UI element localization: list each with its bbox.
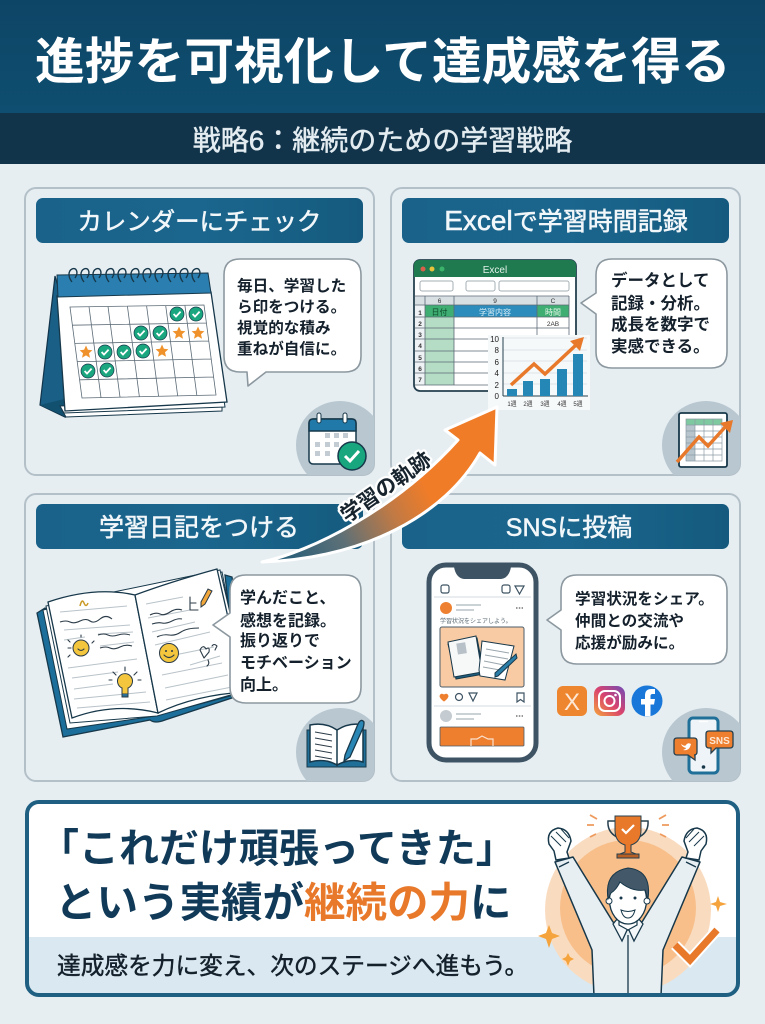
header banner <box>0 0 765 164</box>
title: 進捗を可視化して達成感を得る <box>35 34 731 90</box>
arrow: learning trajectory <box>262 407 497 562</box>
arrow label: 学習の軌跡 <box>337 448 436 527</box>
subtitle band <box>0 113 765 164</box>
illustration: spreadsheet window: 6 <box>438 298 442 305</box>
sparkles <box>538 896 727 966</box>
panel heading: calendar: カレンダーにチェック <box>78 209 321 236</box>
speech bubble: sns <box>547 575 727 664</box>
illustration: spreadsheet window: 2AB <box>547 321 559 328</box>
corner icon: spreadsheet growth <box>662 401 739 474</box>
speech bubble: calendar: 視覚的な積み <box>237 318 331 337</box>
icon: facebook logo <box>632 686 662 716</box>
corner icon: notebook and pen <box>296 708 373 780</box>
illustration: spreadsheet window <box>414 260 576 391</box>
speech bubble: diary <box>213 575 361 703</box>
icon: hearts <box>200 644 217 666</box>
panel heading: excel <box>402 198 729 243</box>
corner icon: phone and chat bubbles <box>662 708 739 780</box>
corner icon: calendar check <box>296 401 373 474</box>
icon: trophy <box>587 815 669 858</box>
panel: sns <box>391 494 750 796</box>
speech bubble: sns: 仲間との交流や <box>575 612 684 630</box>
speech bubble: excel: 成長を数字で <box>611 314 710 334</box>
panel heading: sns <box>402 504 729 549</box>
speech bubble: diary: 感想を記録。 <box>240 611 336 630</box>
illustration: spreadsheet window: 時間 <box>545 308 561 317</box>
bar chart: weekly study time: 4 <box>495 369 500 378</box>
bar chart: weekly study time: 3週 <box>540 400 550 408</box>
bar chart: weekly study time: 10 <box>490 335 500 344</box>
bar chart: weekly study time: 6 <box>495 358 500 367</box>
icon: smiley <box>160 644 178 662</box>
panel heading: calendar <box>36 198 363 243</box>
speech bubble: calendar: ら印をつける。 <box>237 298 346 316</box>
callout: achievements <box>27 802 738 996</box>
speech bubble: diary: 向上。 <box>240 676 288 694</box>
callout lower band <box>27 937 738 995</box>
illustration: spreadsheet window: 9 <box>493 298 497 305</box>
illustration: spreadsheet window: 6 <box>418 366 422 373</box>
speech bubble: diary: モチベーション <box>240 654 352 672</box>
icon: sun face <box>68 635 94 657</box>
callout headline <box>39 827 516 926</box>
speech bubble: sns: 学習状況をシェア。 <box>575 589 714 608</box>
callout subtext: 達成感を力に変え、次のステージへ進もう。 <box>57 953 528 980</box>
illustration: spreadsheet window: 5 <box>418 355 422 362</box>
bar chart: weekly study time <box>488 335 590 410</box>
panel heading: diary <box>36 504 363 549</box>
illustration: spreadsheet window: 7 <box>418 377 422 384</box>
panel heading: excel: Excelで学習時間記録 <box>444 205 688 236</box>
illustration: spreadsheet window: Excel <box>483 265 507 276</box>
panel heading: sns: SNSに投稿 <box>506 514 632 542</box>
illustration: smartphone post <box>429 565 536 760</box>
icon: instagram logo <box>594 686 625 716</box>
illustration: spreadsheet window: 学習内容 <box>479 307 511 317</box>
speech bubble: diary: 学んだこと、 <box>240 588 335 607</box>
bar chart: weekly study time: 2 <box>495 381 500 390</box>
icon: x logo: X <box>564 689 580 716</box>
illustration: person with trophy <box>538 815 727 996</box>
bar chart: weekly study time: 5週 <box>573 400 583 408</box>
bar chart: weekly study time: 8 <box>495 346 500 355</box>
panel heading: diary: 学習日記をつける <box>99 514 299 542</box>
speech bubble: excel: 実感できる。 <box>611 336 710 356</box>
speech bubble: calendar: 重ねが自信に。 <box>237 339 346 358</box>
bar chart: weekly study time: 2週 <box>523 400 533 408</box>
illustration: spreadsheet window: C <box>551 298 556 305</box>
speech bubble: excel: 記録・分析。 <box>611 293 710 313</box>
icon: x logo <box>557 686 587 716</box>
icon: light bulb <box>109 667 141 697</box>
icon: pencil <box>190 589 212 610</box>
bar chart: weekly study time: 0 <box>495 392 500 401</box>
speech bubble: diary: 振り返りで <box>240 632 320 650</box>
corner icon: phone and chat bubbles: SNS <box>709 736 730 747</box>
icon: large check mark <box>675 930 717 960</box>
illustration: spreadsheet window: 4 <box>418 343 422 350</box>
speech bubble: calendar: 毎日、学習した <box>237 276 346 295</box>
illustration: open notebook <box>37 569 250 737</box>
speech bubble: excel <box>581 259 727 368</box>
callout headline: という実績が継続の力に <box>55 879 512 926</box>
illustration: spreadsheet window: 1 <box>418 310 422 317</box>
bar chart: weekly study time: 1週 <box>507 400 517 408</box>
speech bubble: calendar <box>224 259 361 386</box>
panel: calendar <box>25 188 384 489</box>
illustration: desk calendar <box>40 269 227 417</box>
bar chart: weekly study time: 4週 <box>557 400 567 408</box>
subtitle: 戦略6：継続のための学習戦略 <box>193 125 572 156</box>
illustration: spreadsheet window: 3 <box>418 332 422 339</box>
callout border <box>27 802 738 995</box>
illustration: spreadsheet window: 日付 <box>432 307 448 317</box>
speech bubble: sns: 応援が励みに。 <box>575 633 684 652</box>
illustration: smartphone post: 学習状況をシェアしよう。 <box>440 617 512 625</box>
callout headline: 「これだけ頑張ってきた」 <box>39 827 516 871</box>
illustration: spreadsheet window: 2 <box>418 321 422 328</box>
panel: diary <box>25 494 384 796</box>
panel: excel <box>391 188 750 489</box>
speech bubble: excel: データとして <box>611 270 710 290</box>
